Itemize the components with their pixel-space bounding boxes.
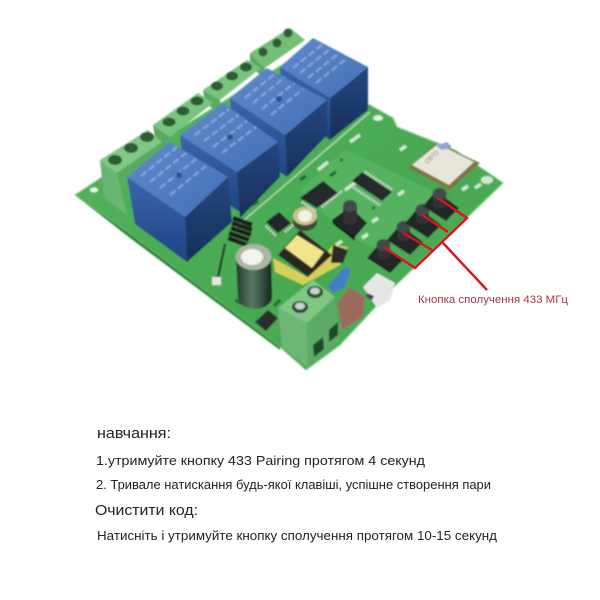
- electrolytic capacitor: [236, 244, 272, 309]
- clear instructions: Натисніть і утримуйте кнопку сполучення протягом 10-15 секунд: [97, 528, 497, 543]
- chip 8-pin: [266, 212, 293, 236]
- callout label: Кнопка сполучення 433 МГц: [418, 294, 569, 306]
- chip 14-pin left: [300, 181, 342, 212]
- wireless module: CBTO: [424, 150, 441, 165]
- antenna coil: [212, 218, 252, 285]
- relay 2: [180, 103, 280, 218]
- heading: clear code: Очистити код:: [95, 502, 198, 519]
- wireless module: [408, 142, 480, 190]
- step 2: 2. Тривале натискання будь-якої клавіші, успішне створення пари: [96, 478, 491, 492]
- smd inductor: [255, 310, 278, 331]
- terminal block 1: [100, 130, 170, 215]
- power terminal block: [278, 280, 340, 368]
- chip 14-pin right: [351, 172, 393, 206]
- product photo: relay board: [75, 28, 503, 370]
- terminal block 3: [203, 60, 261, 115]
- relay 3: [230, 68, 327, 177]
- circuit board: [75, 60, 503, 370]
- heading: learning: навчання:: [97, 425, 171, 442]
- transformer: [273, 230, 348, 285]
- centre push button: [332, 200, 367, 241]
- fuse box: [337, 287, 365, 330]
- step 1: 1.утримуйте кнопку 433 Pairing протягом 4 секунд: [96, 453, 425, 468]
- red callout lines: [385, 198, 487, 290]
- small capacitor: [293, 207, 317, 231]
- relay 1: [127, 142, 232, 262]
- pairing push buttons: [367, 188, 459, 273]
- terminal block 2: [153, 93, 213, 152]
- relay 4: [280, 38, 368, 140]
- blue capacitor: [328, 267, 351, 293]
- usb connector: [363, 273, 395, 308]
- terminal block 4: [250, 28, 305, 80]
